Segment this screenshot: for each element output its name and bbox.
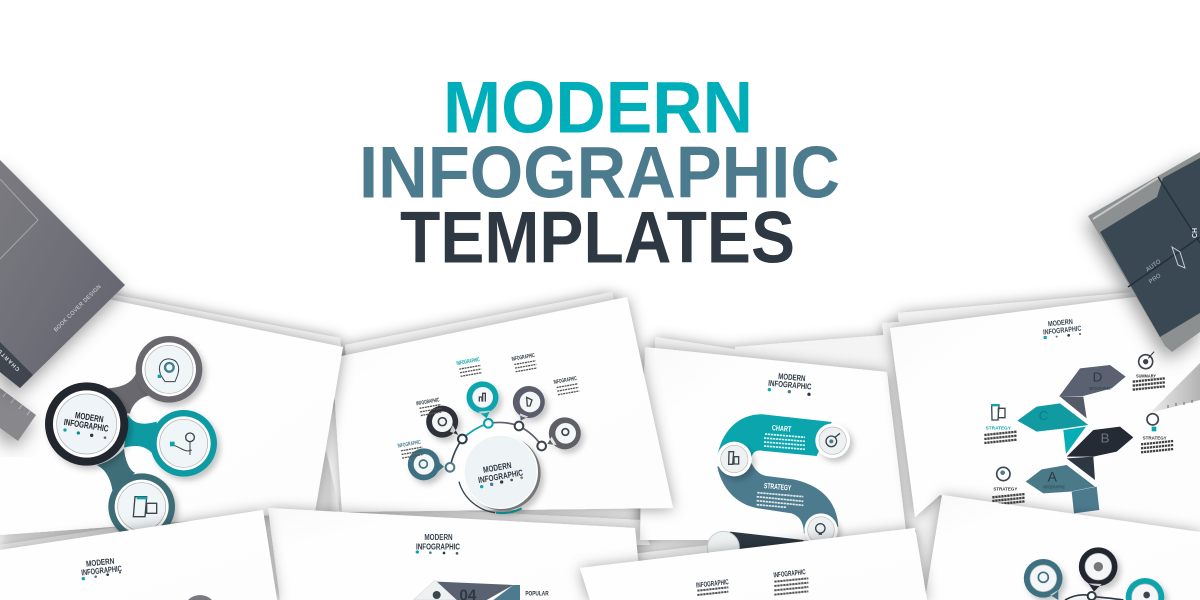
radial diagram xyxy=(385,341,585,513)
side labels and icons: SUMMARY xyxy=(1136,373,1157,379)
slate band: strategy xyxy=(717,463,838,533)
central disc: INFOGRAPHIC xyxy=(477,467,524,485)
chart: numbered envelope: POPULAR xyxy=(525,592,549,598)
panel: pins template bottom right xyxy=(925,495,1200,600)
band labels: CHART xyxy=(772,423,792,434)
arrow A: INFOGRAPHIC xyxy=(1043,485,1065,491)
option text blocks: INFOGRAPHIC xyxy=(416,397,440,407)
side labels and icons xyxy=(984,352,1173,505)
circle: bottom tools xyxy=(108,473,175,540)
icon discs xyxy=(815,423,850,458)
arrow A: A xyxy=(1048,469,1058,485)
panel title xyxy=(768,370,813,392)
back sheets xyxy=(0,292,1135,600)
arrow B xyxy=(1067,427,1133,480)
pin diagram xyxy=(1024,547,1164,600)
panel title: MODERN xyxy=(424,533,453,542)
side labels and icons: STRATEGY xyxy=(986,425,1012,431)
panel title: INFOGRAPHIC xyxy=(81,563,122,577)
option text blocks xyxy=(385,341,585,458)
book cover: BOOK COVER DESIGN xyxy=(53,284,103,333)
arrow D xyxy=(1059,365,1126,418)
teal band: chart xyxy=(717,414,832,457)
timeline nodes xyxy=(446,419,546,472)
option text blocks: INFOGRAPHIC xyxy=(511,353,535,363)
central disc xyxy=(459,435,541,513)
circle: gear head xyxy=(136,336,202,403)
S-curve diagram: STRATEGY xyxy=(764,481,792,493)
arrow B: B xyxy=(1101,431,1110,446)
panel title: MODERN xyxy=(86,556,115,569)
arrow A xyxy=(1026,465,1099,513)
title line: templates: TEMPLATES xyxy=(400,196,795,278)
option text blocks: INFOGRAPHIC xyxy=(553,376,577,386)
panel title: INFOGRAPHIC xyxy=(1043,324,1082,337)
text columns: INFOGRAPHIC xyxy=(773,567,806,580)
circle: main title: INFOGRAPHIC xyxy=(63,417,110,434)
title xyxy=(359,65,840,278)
arrow D: INFOGRAPHIC xyxy=(1089,386,1111,392)
pin markers xyxy=(408,381,581,480)
arrow diagram A B C D xyxy=(984,316,1173,513)
chart: gray disc xyxy=(183,595,217,600)
circle: main title xyxy=(45,382,128,466)
side labels and icons: STRATEGY xyxy=(993,487,1018,493)
arrow D: D xyxy=(1093,370,1102,385)
S-curve diagram xyxy=(707,370,850,563)
panel: radial arc template xyxy=(332,297,673,513)
circle cluster diagram xyxy=(45,336,217,540)
text columns: INFOGRAPHIC xyxy=(696,577,729,590)
device folder: CH xyxy=(1192,228,1199,238)
arc connectors xyxy=(450,422,542,467)
panel title xyxy=(1042,316,1082,337)
circle: main title: MODERN xyxy=(74,410,104,425)
circle: hand and flower xyxy=(150,410,217,477)
panel title: INFOGRAPHIC xyxy=(768,378,812,392)
title line: infographic: INFOGRAPHIC xyxy=(359,131,840,214)
option text blocks: INFOGRAPHIC xyxy=(456,357,480,367)
book cover xyxy=(0,160,125,388)
panel title xyxy=(80,555,217,600)
title line: modern: MODERN xyxy=(443,65,753,148)
folded sheet wedge xyxy=(314,450,340,512)
chart: numbered envelope xyxy=(413,580,549,600)
icon: ruler right xyxy=(1150,363,1200,413)
panel title xyxy=(413,533,549,600)
device folder: PRO xyxy=(1148,273,1163,285)
panel: bottom left template xyxy=(0,510,277,600)
device folder xyxy=(1088,152,1200,352)
option text blocks: INFOGRAPHIC xyxy=(397,440,421,450)
arrow C xyxy=(1017,403,1088,454)
panel: bottom centre template xyxy=(268,508,642,600)
panel title: MODERN xyxy=(778,371,806,383)
device folder: AUTO xyxy=(1145,259,1163,273)
panel: bottom right template xyxy=(580,528,927,600)
panel: S-curve template xyxy=(640,347,907,563)
connectors xyxy=(108,370,152,413)
text columns xyxy=(696,567,808,595)
side labels and icons: STRATEGY xyxy=(1143,435,1167,441)
arrow C: C xyxy=(1039,408,1049,423)
dark band xyxy=(707,532,807,553)
panel title: INFOGRAPHIC xyxy=(416,542,460,551)
central disc: MODERN xyxy=(482,460,512,475)
panel: circles template xyxy=(0,277,343,540)
icon: ruler left xyxy=(0,388,36,441)
panel: arrows template xyxy=(890,290,1200,532)
panel title: MODERN xyxy=(1047,317,1073,328)
